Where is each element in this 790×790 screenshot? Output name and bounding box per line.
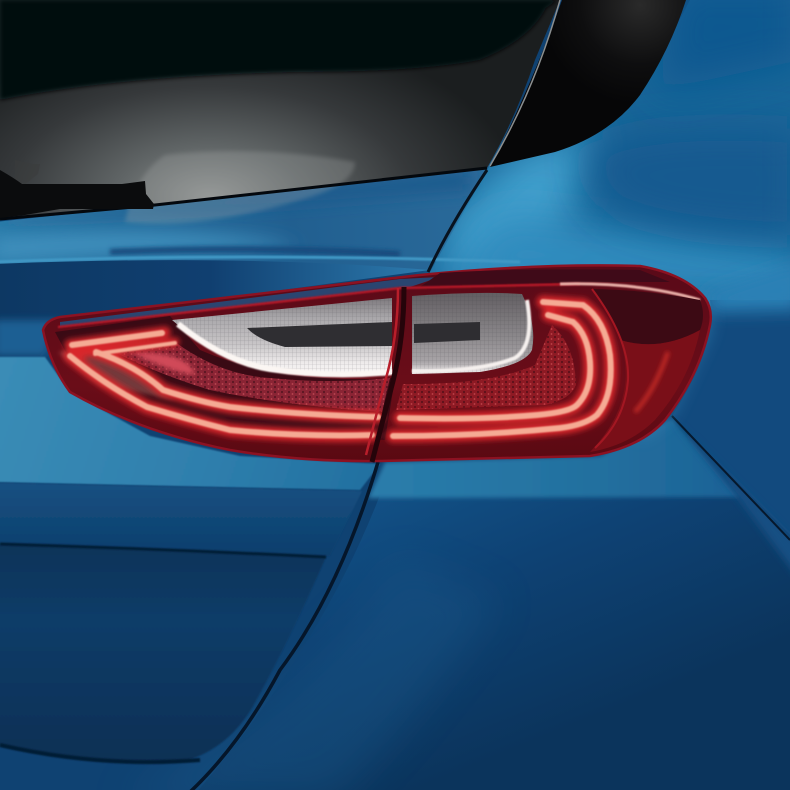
panel below window bbox=[0, 168, 487, 270]
light guide core bbox=[70, 302, 611, 436]
textured red left bbox=[110, 342, 390, 412]
right of lamp bbox=[672, 300, 790, 545]
pillar highlight bbox=[490, 0, 560, 166]
left upper panel bbox=[0, 260, 430, 356]
lens texture bbox=[172, 293, 533, 375]
window reflection bbox=[125, 151, 355, 224]
reverse bar left bbox=[247, 322, 392, 347]
dark upper reflection bbox=[0, 0, 558, 100]
right light band bbox=[368, 418, 740, 498]
inner red line bbox=[58, 284, 580, 327]
textured red right bbox=[396, 325, 576, 410]
window lower seal bbox=[0, 168, 487, 219]
left light band bbox=[0, 357, 380, 490]
wiper mount shadow bbox=[15, 160, 40, 192]
centre split between lamp units bbox=[372, 287, 404, 462]
upper blade reflection bbox=[60, 277, 440, 327]
lens white rim bbox=[178, 324, 392, 374]
tailgate shut line bbox=[190, 462, 378, 790]
rear pillar glass bbox=[490, 0, 686, 167]
right lower body bbox=[190, 495, 790, 790]
rear wiper bbox=[0, 170, 154, 218]
upper shut line bbox=[428, 170, 487, 272]
recess crease lines bbox=[0, 544, 326, 762]
left dark interior bbox=[55, 316, 395, 440]
lower right facet bbox=[590, 330, 700, 452]
right quarter panel bbox=[430, 0, 790, 320]
tail light glow bbox=[590, 266, 712, 440]
reverse bar right bbox=[414, 322, 480, 343]
right facet bbox=[592, 289, 703, 344]
clear lens left bbox=[172, 298, 392, 375]
clear lens right bbox=[412, 293, 533, 374]
left lower band bbox=[0, 483, 362, 556]
rear window bbox=[0, 0, 560, 224]
lamp housing bbox=[43, 265, 711, 461]
guide block border bbox=[592, 289, 628, 448]
right body shut line bbox=[672, 416, 790, 540]
left light wash bbox=[58, 348, 175, 400]
tail light assembly bbox=[43, 265, 711, 462]
housing rim bbox=[43, 265, 711, 461]
top highlight bbox=[560, 284, 700, 300]
lower body recess bbox=[0, 544, 326, 762]
light guide halo bbox=[70, 302, 611, 436]
